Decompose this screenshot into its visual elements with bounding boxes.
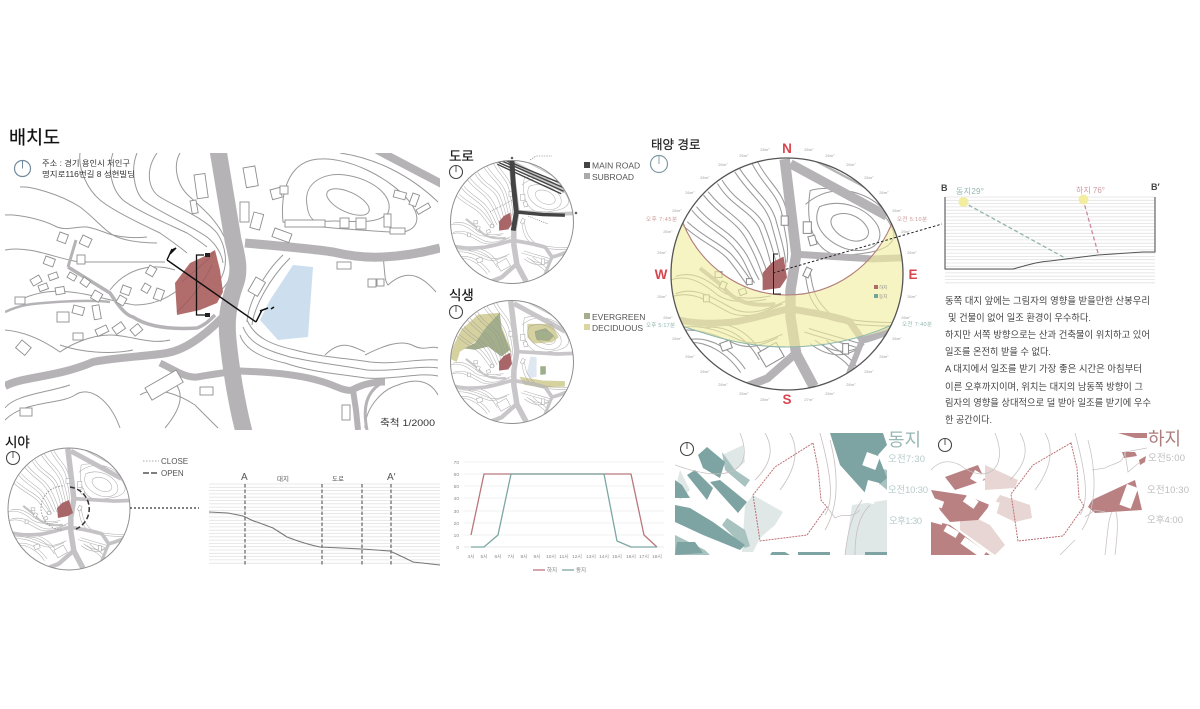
y axis: 10 xyxy=(454,533,459,539)
address: 주소 : 경기 용인시 처인구 xyxy=(42,158,130,168)
icon: compass road xyxy=(450,166,462,178)
legend: sun path: 하지 xyxy=(879,284,887,291)
degree labels: 28m° xyxy=(760,397,770,402)
degree labels: 26m° xyxy=(804,147,814,152)
summer label: 오전10:30 xyxy=(1147,485,1189,496)
north icon xyxy=(14,160,30,176)
site xyxy=(57,500,73,518)
legend: road xyxy=(584,160,640,182)
mid shadows xyxy=(675,452,887,555)
sun band xyxy=(672,223,902,348)
text block: solar analysis: 하지만 서쪽 방향으로는 산과 건축물이 위치하고 있어 xyxy=(945,329,1150,341)
x axis: 10시 xyxy=(546,554,556,560)
x axis xyxy=(467,554,662,560)
legend: sun path xyxy=(874,284,887,300)
icon: compass xyxy=(680,442,694,456)
summer series xyxy=(471,474,657,547)
winter label: 오후1:30 xyxy=(889,516,922,527)
degree labels: 26m° xyxy=(892,336,902,341)
winter series xyxy=(471,474,657,547)
site bracket xyxy=(774,254,781,294)
time labels: 오전 7:40분 xyxy=(902,320,932,328)
address xyxy=(42,158,135,179)
white buildings xyxy=(862,452,880,504)
degree labels: 26m° xyxy=(672,208,682,213)
legend: road: MAIN ROAD xyxy=(592,160,640,170)
x axis: 11시 xyxy=(559,554,569,560)
winter label: 오전10:30 xyxy=(888,485,928,496)
panel: section B-B': 하지 76° xyxy=(1076,185,1105,195)
degree labels xyxy=(657,147,917,402)
panel: sun path diagram xyxy=(646,141,932,407)
contours xyxy=(675,433,870,555)
degree labels: 26m° xyxy=(846,162,856,167)
degree labels: 27m° xyxy=(804,397,814,402)
site outline xyxy=(753,443,827,541)
arrow: dotted leader to section B xyxy=(773,224,942,273)
chart legend: 동지 xyxy=(576,566,586,574)
y axis: 30 xyxy=(454,509,459,515)
legend: vegetation: DECIDUOUS xyxy=(592,323,643,333)
line chart: sunlight hours xyxy=(454,460,664,574)
degree labels: 26m° xyxy=(663,315,673,320)
buildings xyxy=(194,173,208,199)
panel: vegetation circle map xyxy=(450,300,576,424)
degree labels: 26m° xyxy=(739,153,749,158)
icon: compass xyxy=(938,438,952,452)
degree labels: 26m° xyxy=(657,250,667,255)
contours xyxy=(931,433,1147,555)
text block: solar analysis xyxy=(945,295,1151,426)
x axis: 7시 xyxy=(507,554,515,560)
degree labels: 26m° xyxy=(892,208,902,213)
heading: 태양 경로: 태양 경로 xyxy=(651,138,700,152)
panel: winter shadow plan xyxy=(675,430,928,555)
degree labels: 26m° xyxy=(879,354,889,359)
degree labels: 26m° xyxy=(864,175,874,180)
degree labels: 26m° xyxy=(718,382,728,387)
panel: section B-B': 동지29° xyxy=(956,187,984,196)
degree labels: 28m° xyxy=(760,147,770,152)
legend: vegetation xyxy=(584,312,645,333)
x axis: 13시 xyxy=(586,554,596,560)
section labels: B xyxy=(941,183,948,193)
road leader marks xyxy=(490,156,577,224)
section labels: B′ xyxy=(1151,182,1160,192)
summer label: 오후4:00 xyxy=(1147,515,1183,526)
chart legend xyxy=(533,566,586,574)
degree labels: 26m° xyxy=(846,382,856,387)
winter label: 동지 xyxy=(888,430,921,450)
white buildings xyxy=(929,470,1138,558)
heading: 시야: 시야 xyxy=(5,435,30,450)
sun path map xyxy=(671,158,908,390)
chart legend: 하지 xyxy=(547,566,557,574)
pond xyxy=(260,265,313,340)
degree labels: 26m° xyxy=(685,354,695,359)
degree labels: 26m° xyxy=(901,315,911,320)
x axis: 6시 xyxy=(494,554,502,560)
section line B xyxy=(196,255,205,315)
section labels: A xyxy=(241,472,248,483)
winter label xyxy=(888,430,928,527)
arrow: dotted leader to section A xyxy=(130,507,199,509)
y axis: 20 xyxy=(454,521,459,527)
circle outline xyxy=(671,158,903,390)
legend: sun path: 동지 xyxy=(879,293,887,300)
degree labels: 26m° xyxy=(700,175,710,180)
text block: solar analysis: 이른 오후까지이며, 위치는 대지의 남동쪽 방향이 그 xyxy=(945,381,1143,393)
degree labels: 26m° xyxy=(718,162,728,167)
legend: road: SUBROAD xyxy=(592,172,634,182)
section labels xyxy=(941,182,1160,193)
light shadows xyxy=(960,465,1032,555)
degree labels: 26m° xyxy=(901,229,911,234)
summer label: 하지 xyxy=(1148,429,1181,449)
time labels xyxy=(646,215,932,329)
panel: view circle map xyxy=(8,448,132,570)
degree labels: 26m° xyxy=(739,391,749,396)
x axis: 4시 xyxy=(467,554,475,560)
degree labels: 26m° xyxy=(907,294,917,299)
suns xyxy=(958,194,1088,207)
section labels xyxy=(241,472,396,483)
panel: section A-A' xyxy=(209,472,440,565)
time labels: 오전 5:10분 xyxy=(897,215,927,223)
text block: solar analysis: 림자의 영향을 상대적으로 덜 받아 일조를 받기에 우수 xyxy=(945,397,1151,409)
sun rays xyxy=(963,202,1065,258)
y axis: 70 xyxy=(454,460,459,466)
heading: 도로: 도로 xyxy=(449,149,474,164)
dark shadows xyxy=(675,433,887,555)
degree labels: 26m° xyxy=(672,336,682,341)
panel: road circle map xyxy=(450,160,576,284)
cardinal letters: W xyxy=(655,267,668,282)
section labels: A′ xyxy=(387,472,396,483)
x axis: 12시 xyxy=(572,554,582,560)
section labels: 대지 xyxy=(277,474,289,483)
time labels: 오후 5:17분 xyxy=(646,322,675,329)
text block: solar analysis: 및 건물이 없어 일조 환경이 우수하다. xyxy=(948,312,1091,324)
panel: site plan map xyxy=(5,150,442,432)
text block: solar analysis: 동쪽 대지 앞에는 그림자의 영향을 받을만한 산봉우리 xyxy=(945,295,1150,307)
panel: summer shadow plan xyxy=(929,429,1189,558)
view close arc xyxy=(41,486,63,530)
x axis: 16시 xyxy=(626,554,636,560)
cardinal letters xyxy=(655,141,918,407)
address: 명지로116번길 8 성현빌딩 xyxy=(42,169,135,179)
degree labels: 26m° xyxy=(825,153,835,158)
degree labels: 26m° xyxy=(879,190,889,195)
degree labels: 26m° xyxy=(825,391,835,396)
text block: solar analysis: 한 공간이다. xyxy=(945,415,992,426)
roads xyxy=(5,318,222,386)
ground line xyxy=(945,197,1155,269)
legend: vegetation: EVERGREEN xyxy=(592,312,645,322)
x axis: 8시 xyxy=(520,554,528,560)
site xyxy=(175,250,223,315)
degree labels: 26m° xyxy=(657,294,667,299)
y axis: 60 xyxy=(454,472,459,478)
degree labels: 26m° xyxy=(700,369,710,374)
text block: solar analysis: 일조를 온전히 받을 수 없다. xyxy=(945,346,1051,358)
winter label: 오전7:30 xyxy=(888,454,925,465)
legend: view xyxy=(143,457,188,478)
view open arc xyxy=(70,487,89,529)
degree labels: 26m° xyxy=(685,190,695,195)
x axis: 5시 xyxy=(480,554,488,560)
summer label: 오전5:00 xyxy=(1148,453,1185,464)
text block: solar analysis: A 대지에서 일조를 받기 가장 좋은 시간은 아침부터 xyxy=(945,364,1142,375)
icon: compass view xyxy=(6,452,20,464)
icon: compass sun path xyxy=(650,156,668,172)
dark shadows xyxy=(931,433,1147,555)
y axis: 0 xyxy=(456,545,459,551)
section line A xyxy=(167,249,262,322)
cardinal letters: E xyxy=(908,267,918,282)
cardinal letters: N xyxy=(782,141,792,156)
y axis: 50 xyxy=(454,484,459,490)
site outline xyxy=(1011,443,1084,541)
terrain xyxy=(209,512,440,565)
y axis: 40 xyxy=(454,496,459,502)
icon: compass vegetation xyxy=(450,306,462,318)
x axis: 18시 xyxy=(652,554,662,560)
degree labels: 26m° xyxy=(663,229,673,234)
x axis: 14시 xyxy=(599,554,609,560)
cardinal letters: S xyxy=(782,392,792,407)
panel: section B-B' xyxy=(941,182,1160,283)
legend: view: OPEN xyxy=(161,469,184,478)
legend: view: CLOSE xyxy=(161,457,188,466)
x axis: 17시 xyxy=(639,554,649,560)
degree labels: 26m° xyxy=(907,250,917,255)
x axis: 15시 xyxy=(612,554,622,560)
summer label xyxy=(1147,429,1189,526)
scale: 축척 1/2000 xyxy=(380,418,435,429)
time labels: 오후 7:45분 xyxy=(646,216,677,223)
x axis: 9시 xyxy=(533,554,541,560)
degree labels: 26m° xyxy=(864,369,874,374)
light shadows xyxy=(675,445,887,555)
title: 배치도: 배치도 xyxy=(9,127,60,148)
section dashes xyxy=(245,484,391,565)
heading: 식생: 식생 xyxy=(449,288,474,303)
y axis xyxy=(454,460,459,551)
section labels: 도로 xyxy=(332,475,344,483)
